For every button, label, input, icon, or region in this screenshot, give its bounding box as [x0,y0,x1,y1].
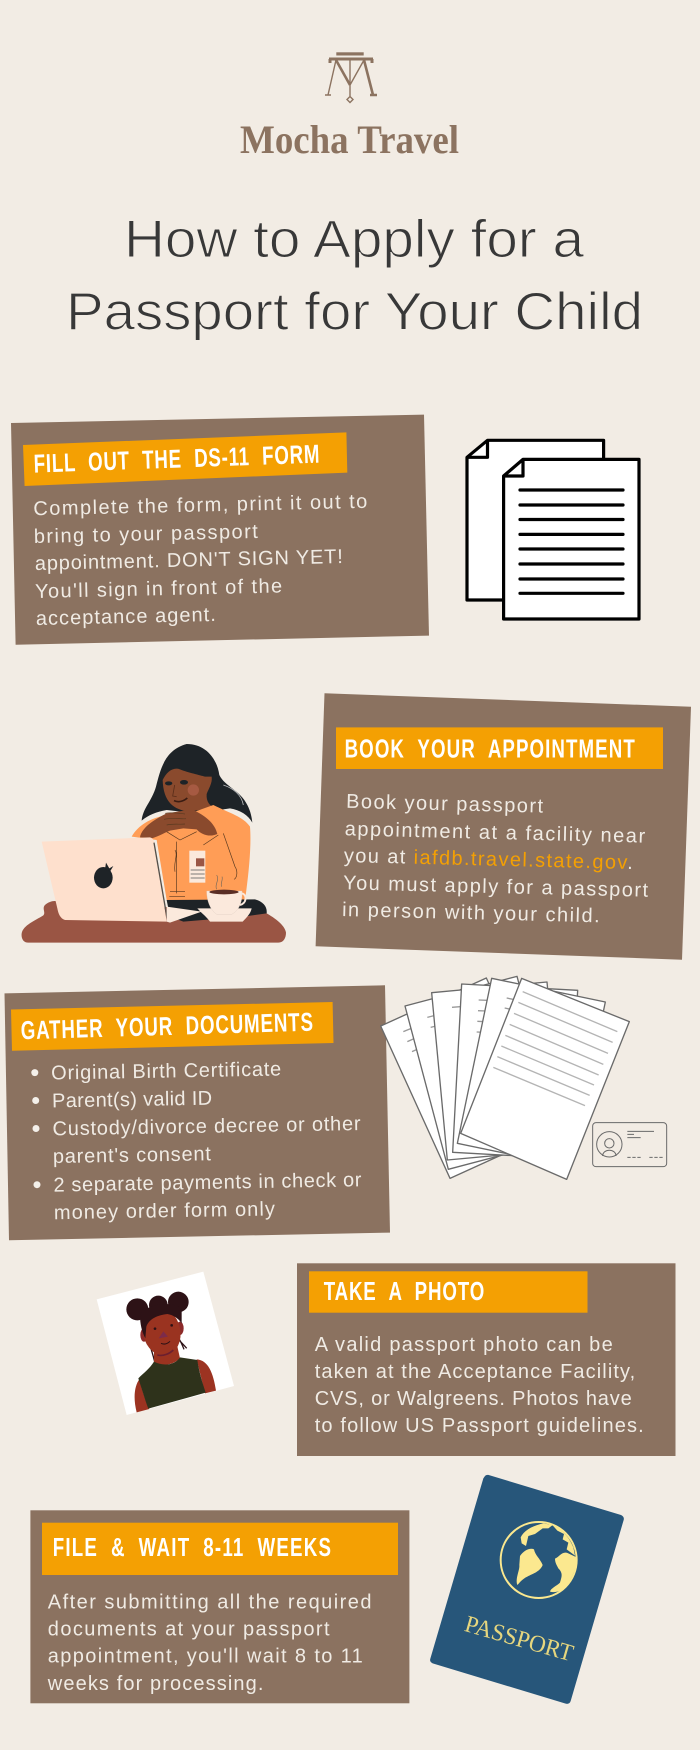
facial features [154,1324,173,1355]
bullet list: Original Birth Certificate [51,1058,281,1084]
logo wordmark: Mocha Travel [240,117,459,162]
icon: stacked documents [467,440,639,619]
panel: take a photo [297,1263,676,1456]
neck [154,1343,180,1365]
shirt lines [164,813,237,897]
hair [126,1292,189,1338]
heading banner: GATHER YOUR DOCUMENTS [20,1007,313,1045]
panel: file and wait [30,1510,409,1703]
coffee cup [197,875,252,922]
panel background [30,1510,409,1703]
title: How to Apply for a [124,210,585,269]
body text: bring to your passport [34,521,258,548]
illustration: woman at laptop [22,744,286,943]
title: Passport for Your Child [66,283,643,342]
title [66,210,643,342]
body text: You must apply for a passport [343,872,649,902]
face [163,769,214,812]
body text [315,1334,644,1437]
body text: appointment, you'll wait 8 to 11 [48,1646,363,1668]
body text: to follow US Passport guidelines. [315,1415,644,1437]
body text [33,491,368,630]
panel: book your appointment [316,693,691,960]
bullet list: Parent(s) valid ID [52,1088,212,1112]
paper text lines [493,992,617,1106]
bullet list: money order form only [54,1198,275,1224]
body text: appointment at a facility near [344,818,646,848]
panel background [297,1263,676,1456]
panel background [316,693,691,960]
body text: weeks for processing. [47,1673,263,1695]
lap [167,899,267,922]
illustration: passport booklet [430,1475,624,1704]
fanned papers [381,976,629,1179]
heading banner [336,727,663,769]
panel: gather your documents [4,985,390,1240]
bullet list [31,1058,362,1224]
face [138,1304,185,1359]
body text: you at iafdb.travel.state.gov. [344,845,633,874]
globe [501,1522,577,1598]
body text: CVS, or Walgreens. Photos have [315,1388,632,1410]
shirt [138,1357,206,1409]
body text: Book your passport [346,791,544,818]
panel background [11,415,429,645]
panel background [4,985,390,1240]
icon: ID card [593,1123,667,1167]
panel: fill out the DS-11 form [11,415,429,645]
passport label: PASSPORT [462,1611,576,1667]
body text: taken at the Acceptance Facility, [315,1361,635,1383]
body text: documents at your passport [48,1618,330,1640]
body text [342,791,649,927]
heading banner: FILL OUT THE DS-11 FORM [33,439,320,478]
heading banner: FILE & WAIT 8-11 WEEKS [53,1532,331,1562]
heading banner: BOOK YOUR APPOINTMENT [345,733,635,763]
badge [189,851,205,883]
body text [47,1591,372,1695]
logo: Mocha Travel [240,53,459,162]
heading banner [42,1523,398,1575]
laptop [42,837,202,923]
hair [142,744,252,823]
hands [140,809,217,838]
table blob [22,901,286,943]
heading banner: TAKE A PHOTO [324,1276,484,1306]
face details [165,780,243,805]
ears [140,1322,184,1342]
bullet list: parent's consent [53,1143,212,1168]
body text: acceptance agent. [36,604,216,630]
icon: TM monogram [325,53,377,102]
body text: in person with your child. [342,899,600,927]
body text: A valid passport photo can be [315,1334,613,1356]
body text: appointment. DON'T SIGN YET! [35,546,343,575]
body text: Complete the form, print it out to [33,491,368,520]
shirt [132,805,250,900]
heading banner [23,432,347,486]
bullet list: 2 separate payments in check or [53,1169,362,1197]
illustration: fanned papers and ID card [381,976,667,1179]
passport cover [430,1475,624,1704]
heading banner [309,1271,588,1313]
body text: After submitting all the required [48,1591,372,1613]
bullet list: Custody/divorce decree or other [52,1113,361,1140]
illustration: passport photo [97,1272,234,1415]
body text: You'll sign in front of the [35,575,282,603]
photo paper [97,1272,234,1415]
hair strands [148,1337,187,1363]
arms [135,1359,216,1412]
